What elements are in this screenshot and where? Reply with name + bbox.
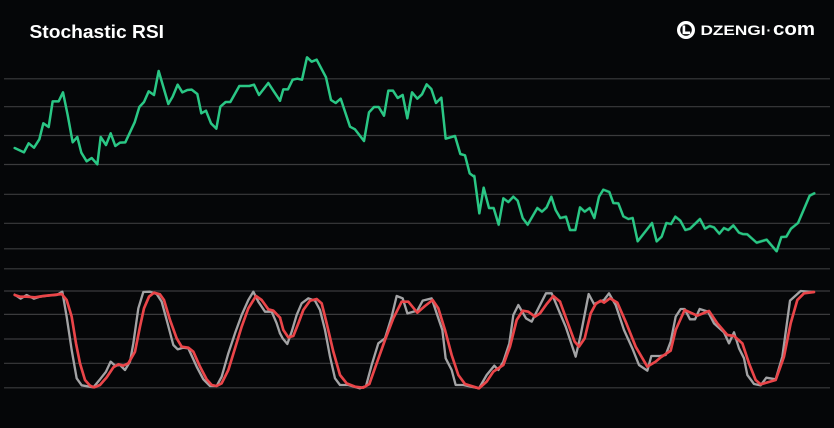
title: Stochastic RSI: [30, 21, 164, 42]
stochastic %K line (grey): [15, 291, 814, 388]
logo: dzengi.com: [679, 18, 815, 39]
stochastic %D line (red): [15, 292, 814, 388]
logo wordmark: ·: [766, 22, 771, 38]
price line (green): [15, 57, 814, 251]
logo wordmark: com: [773, 18, 815, 39]
icon: dzengi mark: [679, 23, 693, 37]
logo wordmark: DZENGI: [700, 22, 766, 38]
logo wordmark: [700, 18, 815, 39]
